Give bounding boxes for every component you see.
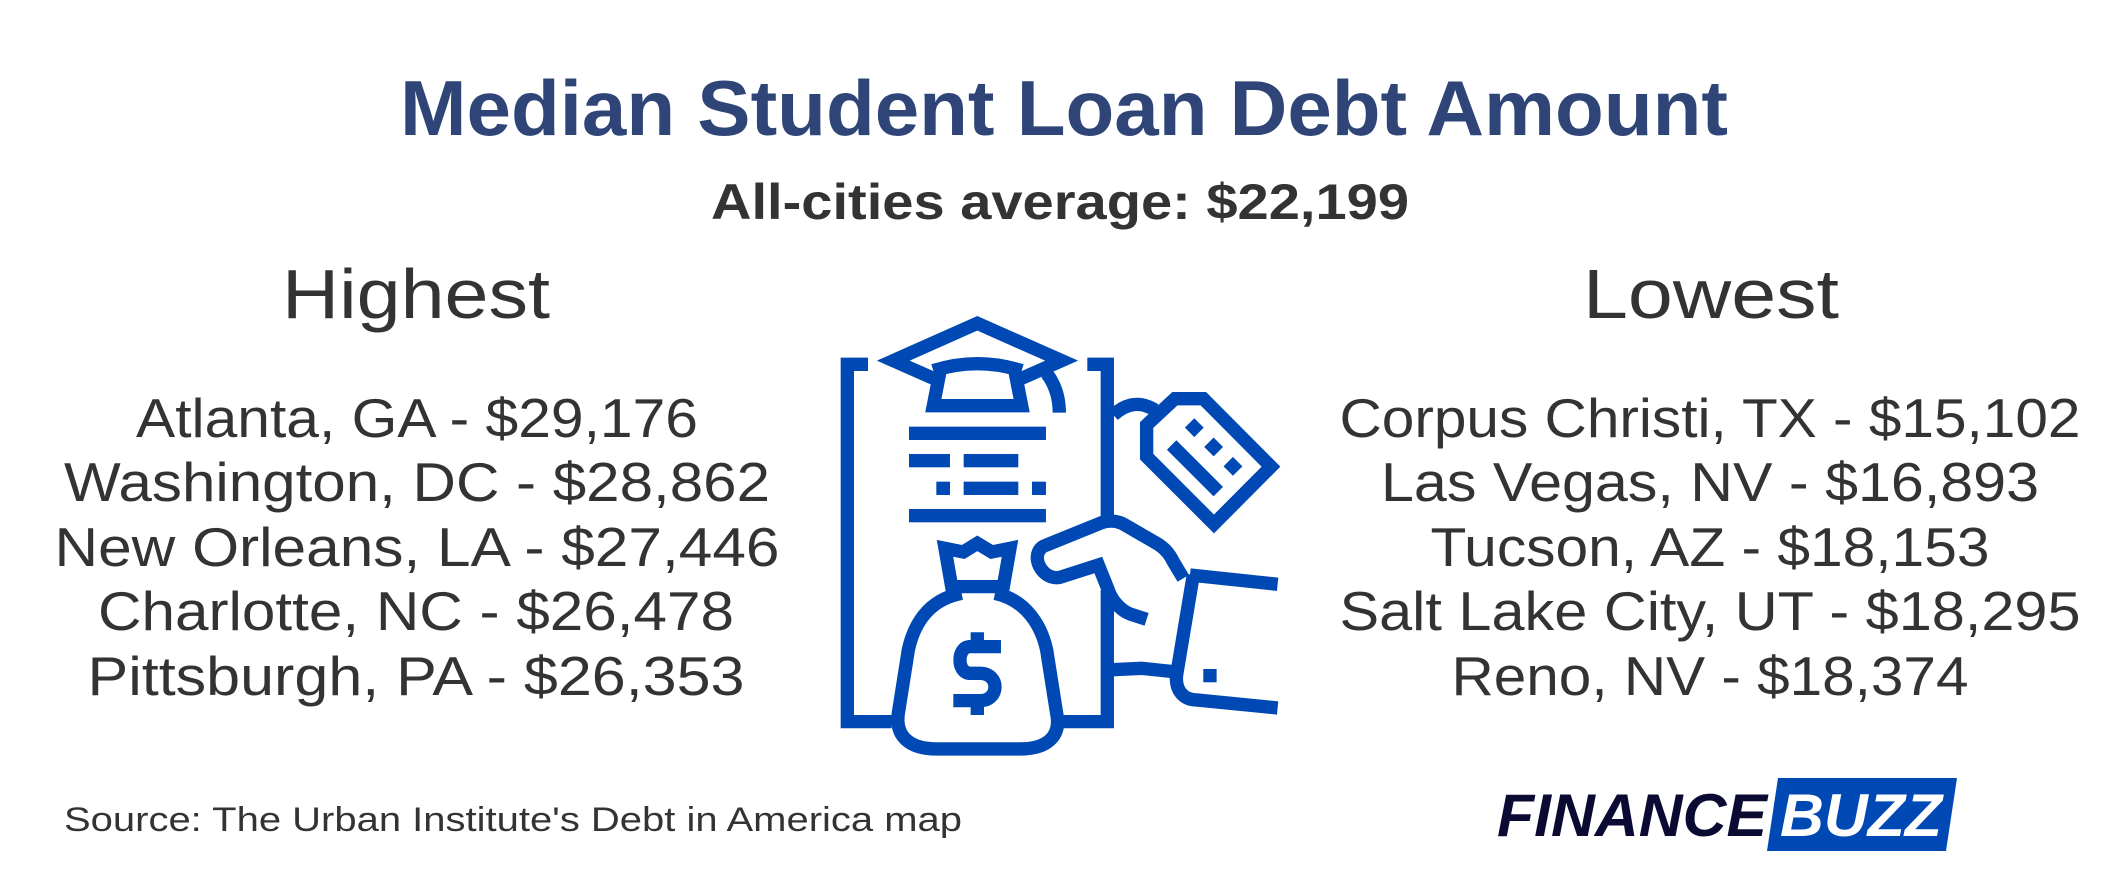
list: highest cities: Atlanta, GA - $29,176 xyxy=(136,387,698,449)
text lines xyxy=(909,427,1217,682)
list: lowest cities: Tucson, AZ - $18,153 xyxy=(1430,516,1990,578)
list: highest cities: Washington, DC - $28,862 xyxy=(64,451,770,513)
icon: diploma, money bag and hand xyxy=(847,323,1278,749)
price tag xyxy=(1113,399,1271,524)
logo: FinanceBuzz: BUZZ xyxy=(1780,782,1944,849)
list: highest cities: Charlotte, NC - $26,478 xyxy=(98,580,734,642)
heading: lowest: Lowest xyxy=(1583,255,1839,333)
logo: FinanceBuzz xyxy=(1497,778,1957,851)
list: lowest cities: Reno, NV - $18,374 xyxy=(1452,645,1968,707)
list: lowest cities: Corpus Christi, TX - $15,102 xyxy=(1340,387,2080,449)
money bag xyxy=(898,543,1058,749)
panel: lowest xyxy=(1340,255,2080,707)
list: lowest cities: Las Vegas, NV - $16,893 xyxy=(1381,451,2039,513)
list: lowest cities xyxy=(1340,387,2080,707)
logo: FinanceBuzz: FINANCE xyxy=(1497,782,1769,849)
source note: Source: The Urban Institute's Debt in America map xyxy=(64,801,962,839)
list: highest cities: New Orleans, LA - $27,446 xyxy=(54,516,780,578)
title: Median Student Loan Debt Amount xyxy=(400,64,1728,152)
subtitle: All-cities average: $22,199 xyxy=(711,174,1409,230)
board xyxy=(847,364,1107,722)
heading: highest: Highest xyxy=(282,255,550,333)
hand xyxy=(1037,521,1183,619)
list: highest cities: Pittsburgh, PA - $26,353 xyxy=(88,645,744,707)
panel: highest xyxy=(54,255,780,707)
list: highest cities xyxy=(54,387,780,707)
graduation cap xyxy=(893,323,1062,413)
list: lowest cities: Salt Lake City, UT - $18,295 xyxy=(1340,580,2080,642)
